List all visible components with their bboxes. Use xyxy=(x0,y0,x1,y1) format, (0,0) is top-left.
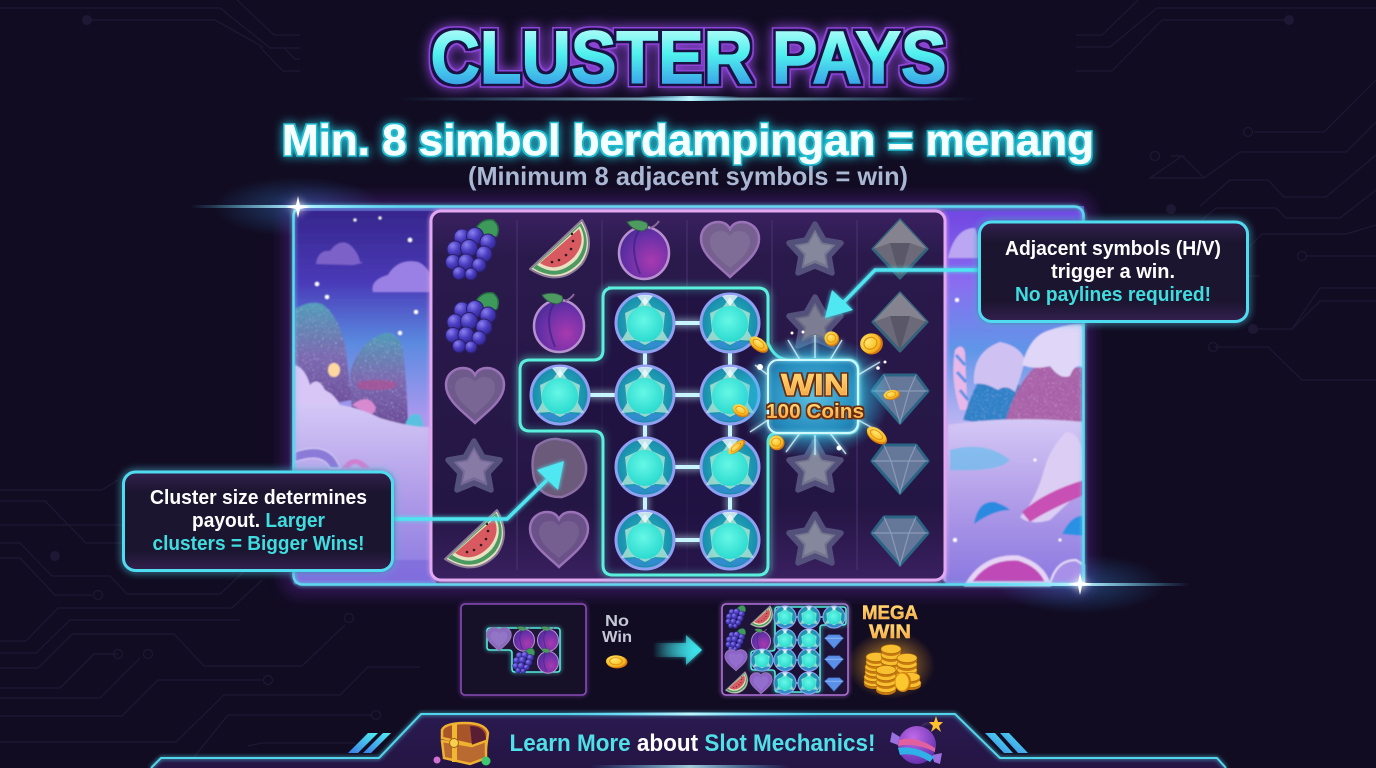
callout: cluster size: Cluster size determines xyxy=(150,487,367,509)
burst rays xyxy=(750,335,880,455)
callout: cluster size: payout. Larger xyxy=(192,510,325,532)
panel: small no-win cluster xyxy=(461,604,586,695)
scene: right candy land xyxy=(942,207,1084,584)
win text: WIN xyxy=(781,367,849,402)
burst glow xyxy=(735,334,891,458)
mega win label xyxy=(862,603,918,643)
icon: coin pile xyxy=(847,631,935,699)
callout: cluster size: clusters = Bigger Wins! xyxy=(152,533,364,555)
cluster gems xyxy=(531,294,759,569)
banner highlight xyxy=(560,712,820,768)
burst box fill xyxy=(768,360,858,433)
win burst badge xyxy=(726,329,901,458)
no win label: No xyxy=(605,613,629,630)
title underline glow xyxy=(400,96,976,101)
cluster connectors xyxy=(589,323,730,540)
panel glow xyxy=(213,177,1165,614)
subtitle: Min. 8 simbol berdampingan = menang xyxy=(282,116,1094,165)
winning cluster outline xyxy=(520,288,858,575)
panel: small mega-win cluster xyxy=(722,604,848,695)
sparkle: top-left flare xyxy=(190,196,410,218)
mega win label: MEGA xyxy=(862,603,918,624)
right chevron stripes xyxy=(985,733,1028,753)
row 1 symbols xyxy=(446,220,927,280)
flying coins xyxy=(726,329,901,457)
sparkle: bottom-right flare xyxy=(970,573,1190,595)
row 3 symbols xyxy=(446,368,928,423)
panel: reel grid xyxy=(431,211,945,580)
row 5 symbols xyxy=(445,510,928,567)
scene: left candy land xyxy=(294,207,436,584)
no win label second line: Win xyxy=(602,629,632,646)
row 2 symbols xyxy=(446,293,927,353)
callout: cluster size xyxy=(124,472,392,570)
callout: adjacent symbols: trigger a win. xyxy=(1051,261,1175,283)
banner text: Learn More about Slot Mechanics! xyxy=(510,730,876,757)
outer cyan frame xyxy=(294,206,1084,584)
arrow: small to large cluster xyxy=(653,635,702,665)
arrow: cluster size callout to symbol xyxy=(388,461,564,519)
burst sparkles xyxy=(757,330,886,450)
scene: top trim xyxy=(294,206,1084,211)
icon: no win coin xyxy=(606,655,628,668)
100 coins text: 100 Coins xyxy=(766,401,864,423)
translated subtitle: (Minimum 8 adjacent symbols = win) xyxy=(468,161,908,191)
callout: adjacent symbols xyxy=(980,222,1248,322)
left chevron stripes xyxy=(348,733,391,753)
arrow: adjacent symbols callout to star xyxy=(825,270,985,318)
callout: adjacent symbols: Adjacent symbols (H/V) xyxy=(1005,238,1221,260)
title: CLUSTER PAYS xyxy=(430,16,946,99)
icon: treasure chest xyxy=(434,723,490,766)
callout: adjacent symbols: No paylines required! xyxy=(1015,284,1211,306)
column dividers xyxy=(517,220,857,570)
row 4 symbols xyxy=(448,439,928,497)
mega win label: WIN xyxy=(869,622,911,643)
panel: game board xyxy=(190,177,1190,614)
icon: candy bomb xyxy=(890,716,943,764)
banner xyxy=(151,712,1226,768)
